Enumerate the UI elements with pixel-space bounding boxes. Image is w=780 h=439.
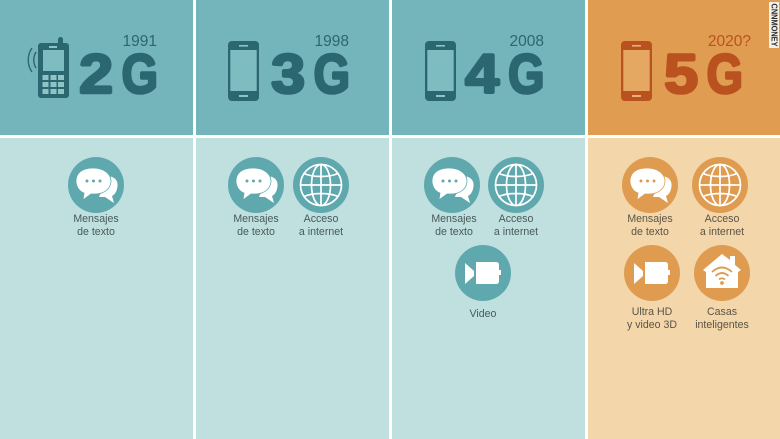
body panel 2G <box>0 138 193 439</box>
heading 2G: G <box>122 42 158 105</box>
feature: mensajes de texto <box>424 157 480 238</box>
heading 3G <box>271 42 350 105</box>
panel: 3G <box>196 0 389 439</box>
header band 5G <box>588 0 780 135</box>
feature: mensajes de texto <box>68 157 124 238</box>
header band 3G <box>196 0 389 135</box>
header band 4G <box>392 0 585 135</box>
heading 5G <box>664 42 743 105</box>
feature: acceso a internet <box>488 157 544 238</box>
feature: mensajes de texto: de texto <box>77 226 115 238</box>
feature: ultra hd y video 3d: Ultra HD <box>632 306 673 318</box>
body panel 4G <box>392 138 585 439</box>
feature: video: Video <box>470 308 497 320</box>
feature: casas inteligentes: inteligentes <box>695 319 749 331</box>
year 2008: 2008 <box>510 33 544 50</box>
feature: mensajes de texto: Mensajes <box>431 213 477 225</box>
heading 4G <box>465 42 545 105</box>
heading 2G: 2 <box>79 44 113 105</box>
feature: acceso a internet: Acceso <box>705 213 739 225</box>
icon: smartphone <box>425 41 456 101</box>
logo: cnnmoney: CNNMONEY <box>770 4 778 47</box>
feature: acceso a internet: a internet <box>700 226 744 238</box>
feature: mensajes de texto: Mensajes <box>233 213 279 225</box>
panel: 5G <box>588 0 780 439</box>
feature: mensajes de texto: de texto <box>435 226 473 238</box>
heading 4G: 4 <box>465 44 500 105</box>
feature: casas inteligentes <box>694 245 750 331</box>
body panel 5G <box>588 138 780 439</box>
feature: ultra hd y video 3d <box>624 245 680 331</box>
feature: ultra hd y video 3d: y video 3D <box>627 319 677 331</box>
feature: acceso a internet: a internet <box>494 226 538 238</box>
feature: acceso a internet <box>692 157 748 238</box>
icon: smartphone <box>621 41 652 101</box>
feature: mensajes de texto <box>228 157 284 238</box>
feature: mensajes de texto: Mensajes <box>73 213 119 225</box>
panel: 2G <box>0 0 193 439</box>
header band 2G <box>0 0 193 135</box>
feature: acceso a internet: a internet <box>299 226 343 238</box>
feature: acceso a internet <box>293 157 349 238</box>
feature: mensajes de texto: Mensajes <box>627 213 673 225</box>
year 2020?: 2020? <box>708 33 751 50</box>
icon: smart home <box>703 254 741 288</box>
feature: video <box>455 245 511 320</box>
heading 5G: 5 <box>664 44 698 105</box>
heading 3G: 3 <box>271 44 305 105</box>
panel: 4G <box>392 0 585 439</box>
feature: mensajes de texto <box>622 157 678 238</box>
heading 4G: G <box>508 42 545 105</box>
heading 2G <box>79 42 158 105</box>
icon: smartphone <box>228 41 259 101</box>
year 1991: 1991 <box>123 33 157 50</box>
feature: acceso a internet: Acceso <box>304 213 338 225</box>
icon: feature phone <box>28 37 69 98</box>
heading 5G: G <box>706 42 743 105</box>
year 1998: 1998 <box>315 33 349 50</box>
feature: casas inteligentes: Casas <box>707 306 737 318</box>
feature: mensajes de texto: de texto <box>237 226 275 238</box>
feature: acceso a internet: Acceso <box>499 213 533 225</box>
feature: mensajes de texto: de texto <box>631 226 669 238</box>
body panel 3G <box>196 138 389 439</box>
heading 3G: G <box>314 42 350 105</box>
